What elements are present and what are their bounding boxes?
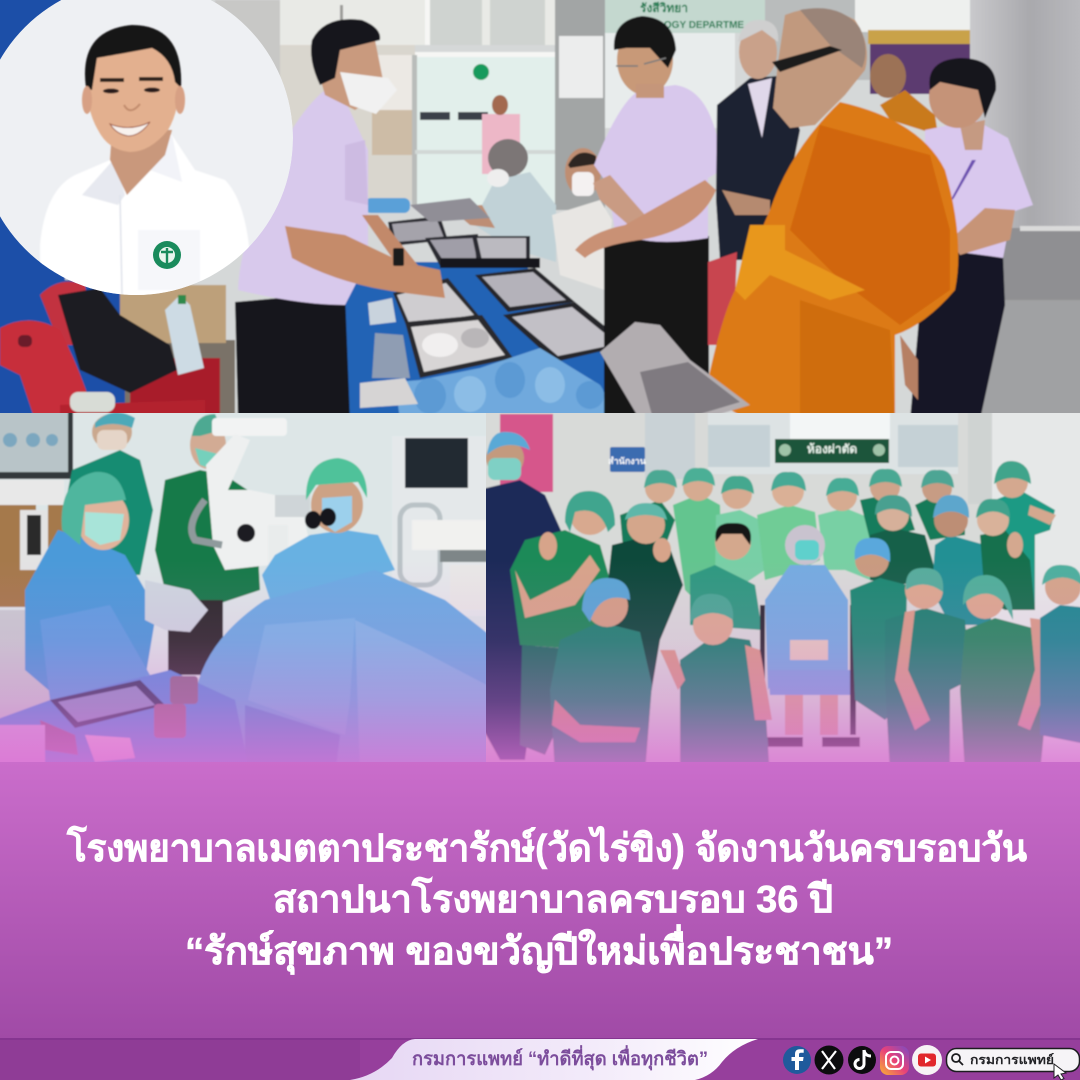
table with trays — [344, 197, 606, 413]
blue room sign: สำนักงาน — [608, 456, 647, 466]
search box with cursor: กรมการแพทย์ — [970, 1053, 1054, 1067]
navy scrubs man — [486, 431, 562, 760]
short haired woman in teal — [690, 523, 762, 630]
heading line 3: “รักษ์สุขภาพ ของขวัญปีใหม่เพื่อประชาชน” — [185, 924, 893, 975]
portrait circle of director — [0, 0, 293, 300]
panel: top photo of hospital event: OLOGY DEPARTME — [650, 20, 744, 31]
operating room sign — [775, 439, 889, 463]
pink nurse — [480, 94, 520, 174]
heading line 2: สถาปนาโรงพยาบาลครบรอบ 36 ปี — [273, 876, 833, 921]
gradient fade over lower photos — [0, 560, 1080, 762]
background nurse in green — [62, 413, 153, 575]
icon: tiktok — [848, 1046, 876, 1074]
blue room sign — [608, 447, 647, 472]
centre nurse in green — [155, 414, 260, 675]
monk in orange robe — [705, 8, 958, 420]
ribbon with department slogan: กรมการแพทย์ “ทำดีที่สุด เพื่อทุกชีวิต” — [412, 1045, 708, 1071]
ribbon with department slogan — [350, 1039, 758, 1080]
second monk behind — [870, 54, 938, 135]
panel: top photo of hospital event — [0, 0, 1080, 420]
icon: instagram — [880, 1046, 909, 1075]
team in teal scrubs, right side — [850, 538, 1080, 775]
icon: X — [814, 1046, 844, 1074]
panel: bottom right group photo — [478, 405, 1080, 775]
man in dark suit — [716, 20, 800, 260]
icon: youtube — [912, 1045, 942, 1075]
left surgeon in blue gown — [25, 472, 208, 700]
right surgeon in blue gown — [262, 458, 395, 615]
man in lavender shirt at left — [235, 19, 445, 420]
staff row with dark green scrubs — [870, 495, 1035, 625]
red chair behind monk — [708, 252, 737, 345]
woman with V sign in green scrubs — [510, 491, 615, 755]
back row staff in mint scrubs — [620, 461, 1056, 610]
neck and face — [110, 130, 172, 195]
pink notice board — [500, 414, 553, 492]
man in lavender shirt centre — [575, 16, 722, 420]
panel: top photo of hospital event: รังสีวิทยา — [640, 1, 688, 15]
silver supply bags in front — [600, 322, 750, 420]
operating microscope — [192, 418, 310, 580]
white shirt — [40, 135, 250, 300]
icon: facebook — [783, 1046, 811, 1074]
grey haired woman writing — [464, 138, 557, 262]
panel: purple title band — [0, 762, 1080, 1040]
anesthesia machine — [397, 437, 486, 610]
woman in lavender shirt — [910, 58, 1033, 420]
heading line 1: โรงพยาบาลเมตตาประชารักษ์(วัดไร่ขิง) จัดงานวันครบรอบวัน — [66, 825, 1027, 870]
ministry emblem on shirt — [153, 241, 181, 269]
blue surgical drape — [197, 572, 486, 762]
patient in wheelchair — [760, 525, 860, 747]
seated woman in white — [552, 148, 612, 290]
search box with cursor — [946, 1048, 1080, 1080]
woman in black-green scrubs — [607, 503, 683, 700]
instrument table — [0, 669, 244, 762]
panel: footer bar — [0, 1038, 1080, 1080]
panel: bottom left photo of surgical team — [0, 405, 500, 775]
operating room sign: ห้องผ่าตัด — [807, 442, 857, 456]
team kneeling in front, left side — [550, 578, 772, 775]
